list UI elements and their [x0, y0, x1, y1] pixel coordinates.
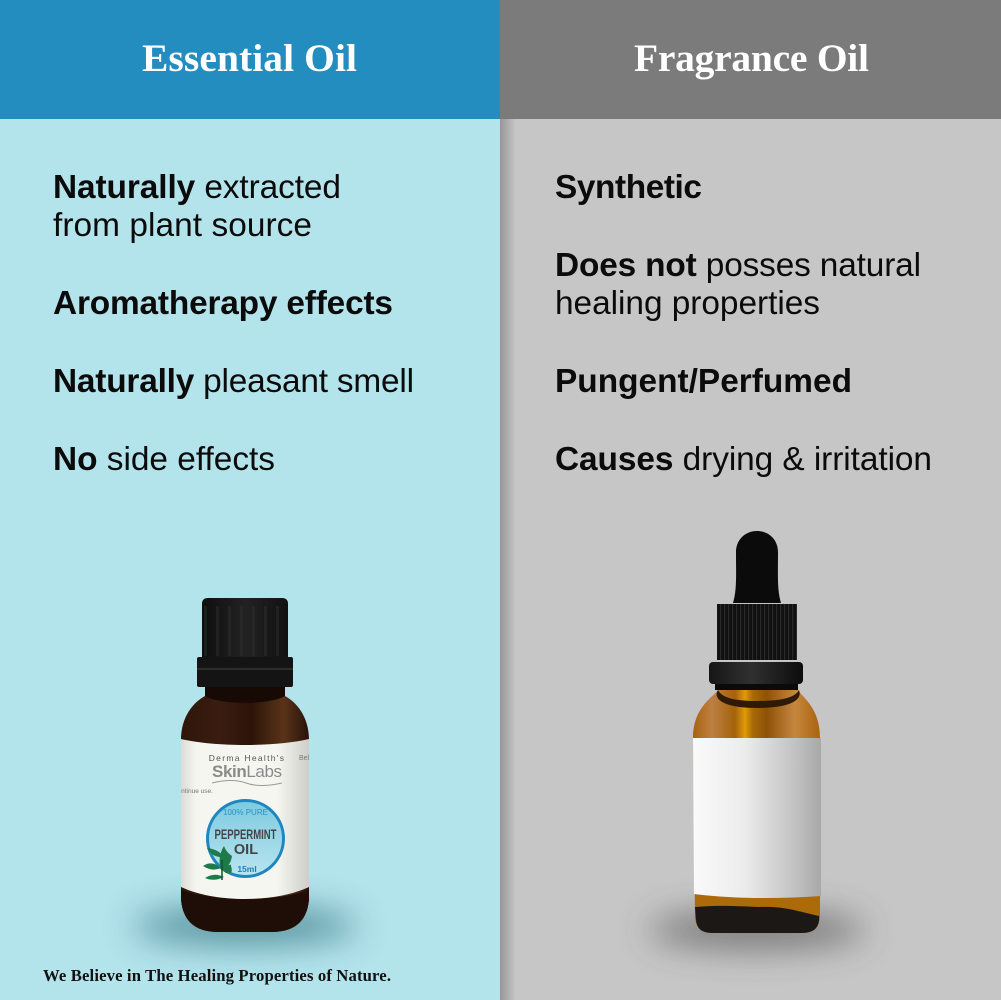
- icon: peppermint oil bottle: Derma Health's: [209, 753, 285, 763]
- header: fragrance oil: Fragrance Oil: [634, 36, 869, 80]
- icon: peppermint oil bottle: OIL: [234, 842, 258, 858]
- text block: essential oil properties: Naturally pleasant smell: [53, 363, 414, 400]
- panel: essential oil background: [0, 119, 500, 1000]
- icon: peppermint oil bottle: ntinue use.: [181, 788, 213, 795]
- text block: fragrance oil properties: [555, 169, 932, 478]
- text block: essential oil properties: Aromatherapy effects: [53, 285, 393, 322]
- icon: peppermint oil bottle: [133, 598, 357, 945]
- icon: peppermint oil bottle: 100% PURE: [223, 808, 268, 817]
- text block: essential oil properties: [53, 169, 414, 478]
- text block: fragrance oil properties: Pungent/Perfumed: [555, 363, 852, 400]
- tagline: We Believe in The Healing Properties of Nature.: [43, 966, 391, 985]
- text block: essential oil properties: No side effects: [53, 441, 275, 478]
- text block: fragrance oil properties: Does not posses natural: [555, 247, 921, 284]
- header: essential oil: Essential Oil: [142, 36, 357, 80]
- header: essential oil: [0, 0, 500, 119]
- icon: peppermint oil bottle: 15ml: [237, 864, 257, 874]
- icon: peppermint oil bottle: Bel: [299, 755, 309, 762]
- text block: fragrance oil properties: healing properties: [555, 285, 820, 322]
- text block: fragrance oil properties: Causes drying & irritation: [555, 441, 932, 478]
- text block: essential oil properties: from plant source: [53, 207, 312, 244]
- text block: essential oil properties: Naturally extracted: [53, 169, 341, 206]
- text block: fragrance oil properties: Synthetic: [555, 169, 702, 206]
- icon: peppermint oil bottle: SkinLabs: [212, 762, 282, 781]
- icon: peppermint oil bottle: PEPPERMINT: [214, 827, 277, 842]
- icon: blank dropper bottle: [649, 531, 865, 949]
- header: fragrance oil: [500, 0, 1001, 119]
- panel: fragrance oil background: [500, 119, 1001, 1000]
